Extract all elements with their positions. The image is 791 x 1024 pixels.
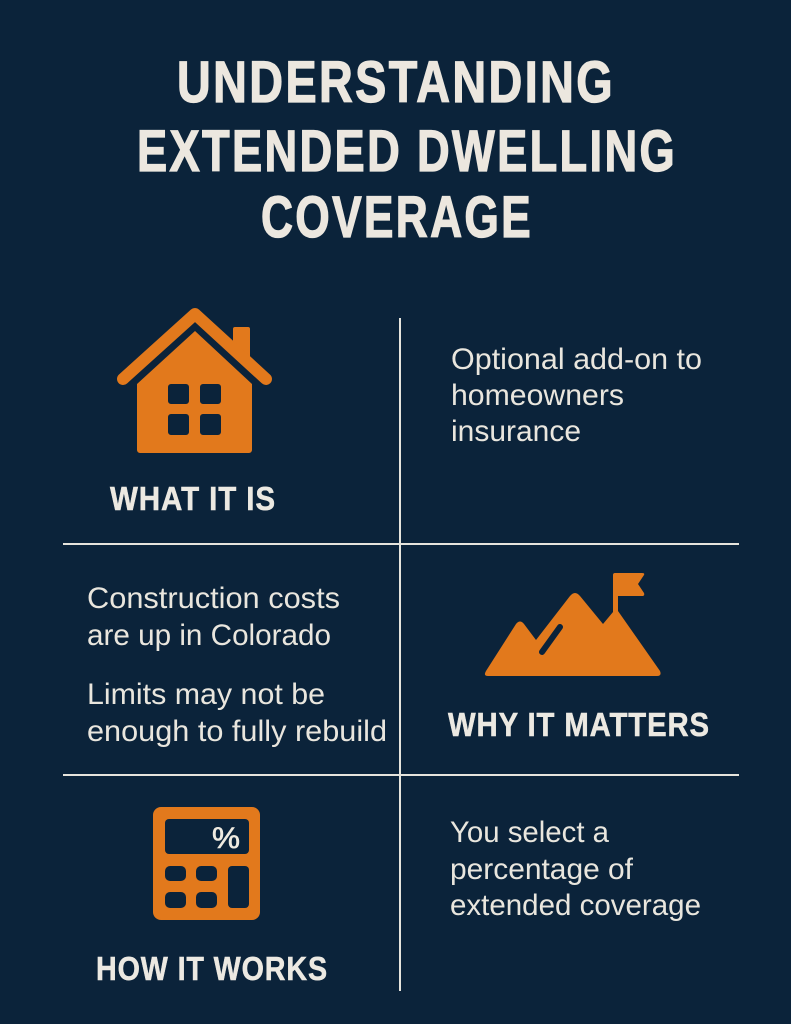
panel: why it matters <box>87 573 710 748</box>
text: what it is description: Optional add-on to <box>451 343 702 376</box>
text: why it matters description: Construction costs <box>87 582 340 615</box>
text: what it is description: homeowners <box>451 379 624 412</box>
panel: what it is <box>110 314 702 517</box>
icon: house <box>123 314 266 453</box>
icon: calculator <box>153 807 260 920</box>
panel: how it works <box>96 807 701 987</box>
heading: why it matters: WHY IT MATTERS <box>448 706 710 743</box>
icon: mountain with flag <box>485 573 661 676</box>
icon: calculator: % <box>212 822 240 855</box>
text: what it is description: insurance <box>451 415 581 448</box>
title <box>137 50 677 250</box>
title: UNDERSTANDING <box>177 50 615 115</box>
text: what it is description <box>451 343 702 448</box>
text: how it works description: You select a <box>450 816 609 849</box>
text: why it matters description: enough to fully rebuild <box>87 715 387 748</box>
heading: how it works: HOW IT WORKS <box>96 950 328 987</box>
text: why it matters description <box>87 582 387 748</box>
text: how it works description <box>450 816 701 922</box>
text: why it matters description: are up in Colorado <box>87 619 331 652</box>
text: how it works description: percentage of <box>450 853 634 886</box>
heading: what it is: WHAT IT IS <box>110 480 276 517</box>
title: COVERAGE <box>261 185 533 250</box>
text: how it works description: extended coverage <box>450 889 701 922</box>
text: why it matters description: Limits may not be <box>87 678 325 711</box>
